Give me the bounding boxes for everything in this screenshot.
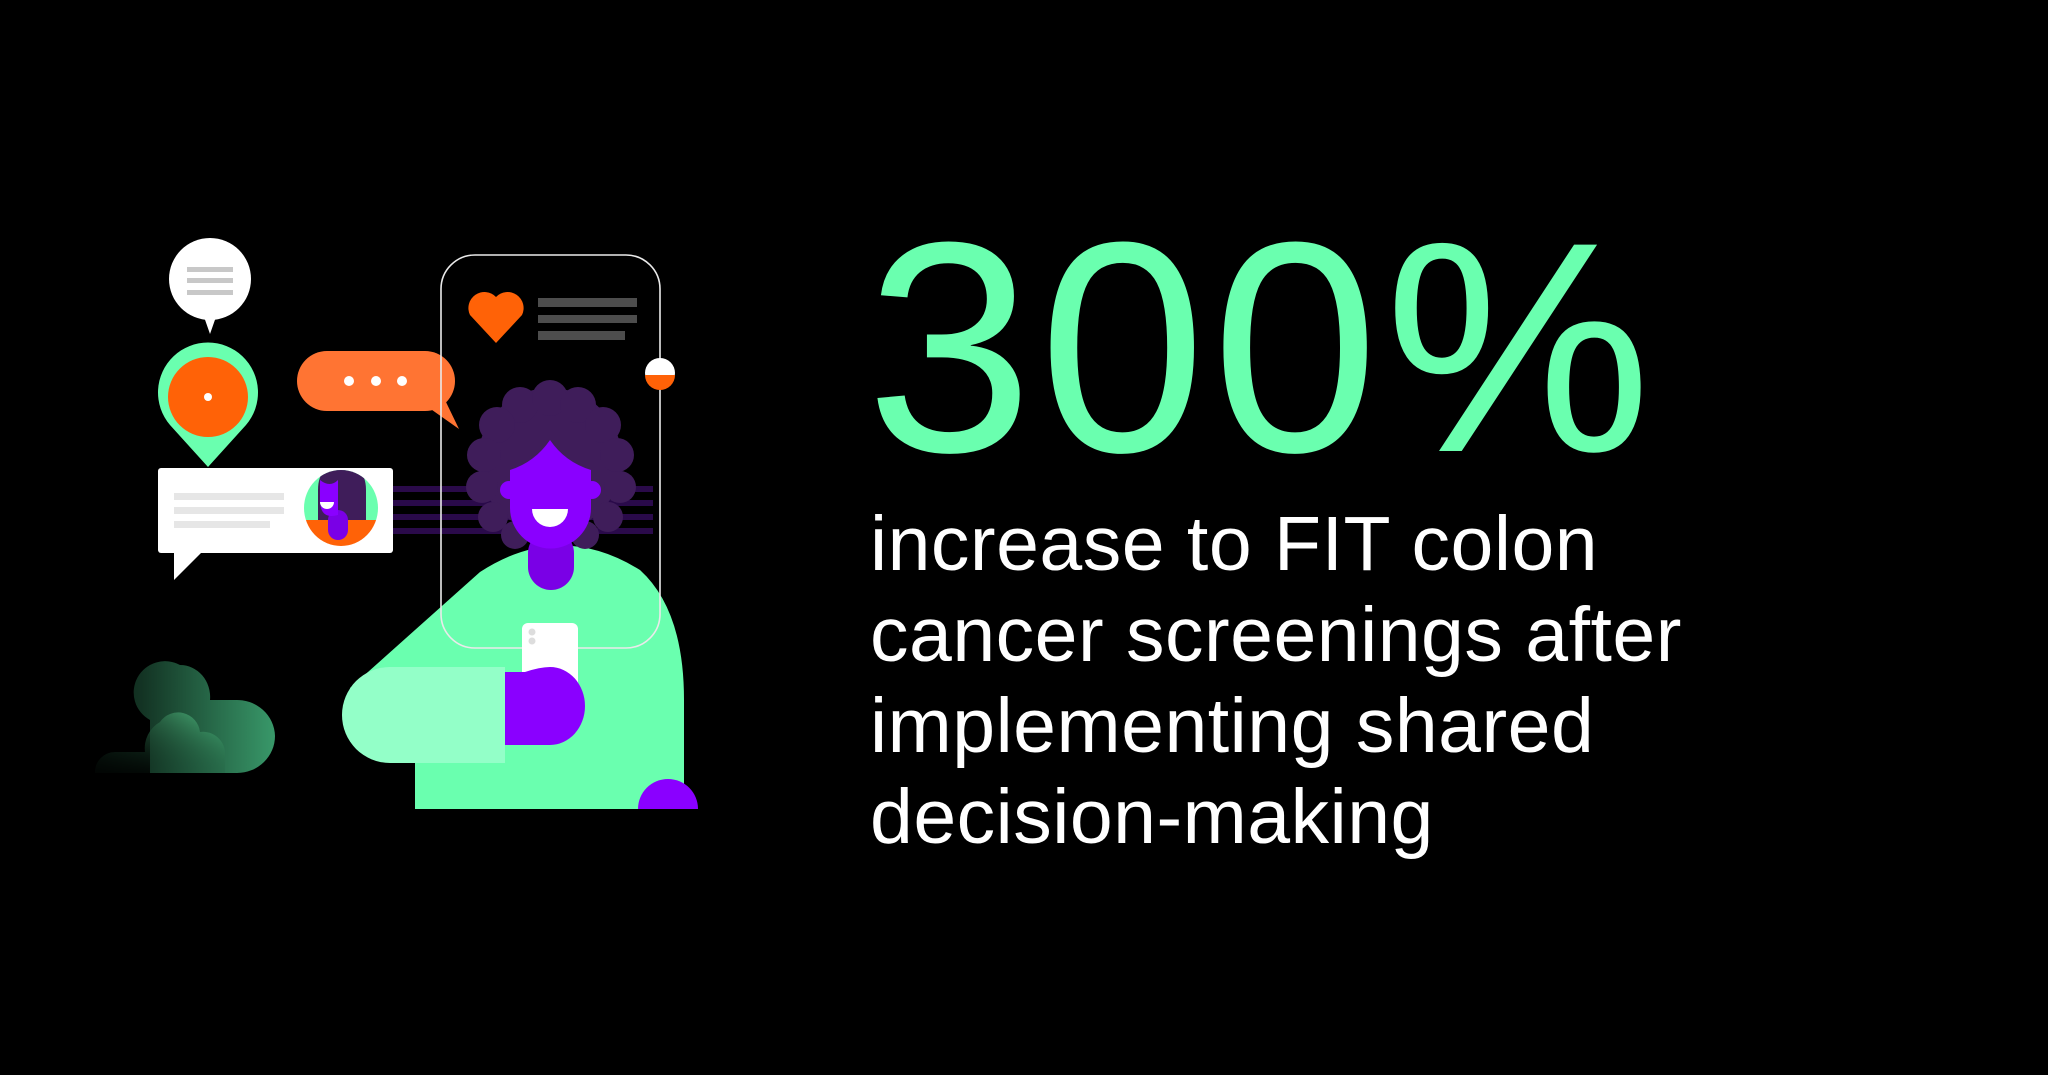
description text: cancer screenings after	[870, 592, 1682, 678]
illustration	[96, 238, 698, 809]
chat card with avatar	[158, 465, 393, 580]
bottom purple shape	[638, 779, 698, 809]
description text: implementing shared	[870, 683, 1594, 769]
arm	[342, 667, 505, 763]
cloud	[96, 661, 275, 773]
location pin	[158, 343, 258, 467]
hand	[505, 667, 585, 745]
phone frame outline	[441, 255, 660, 648]
head	[466, 380, 636, 590]
headline number: 300%	[866, 179, 1657, 515]
white speech bubble	[169, 238, 251, 334]
handheld phone	[522, 623, 578, 695]
phone text lines	[538, 298, 637, 340]
description text	[870, 501, 1682, 860]
slider knob	[645, 358, 675, 390]
description text: decision-making	[870, 774, 1434, 860]
description text: increase to FIT colon	[870, 501, 1598, 587]
heart icon	[468, 292, 524, 343]
person body	[342, 255, 698, 809]
purple connector lines	[393, 486, 653, 534]
orange typing bubble	[297, 351, 459, 429]
